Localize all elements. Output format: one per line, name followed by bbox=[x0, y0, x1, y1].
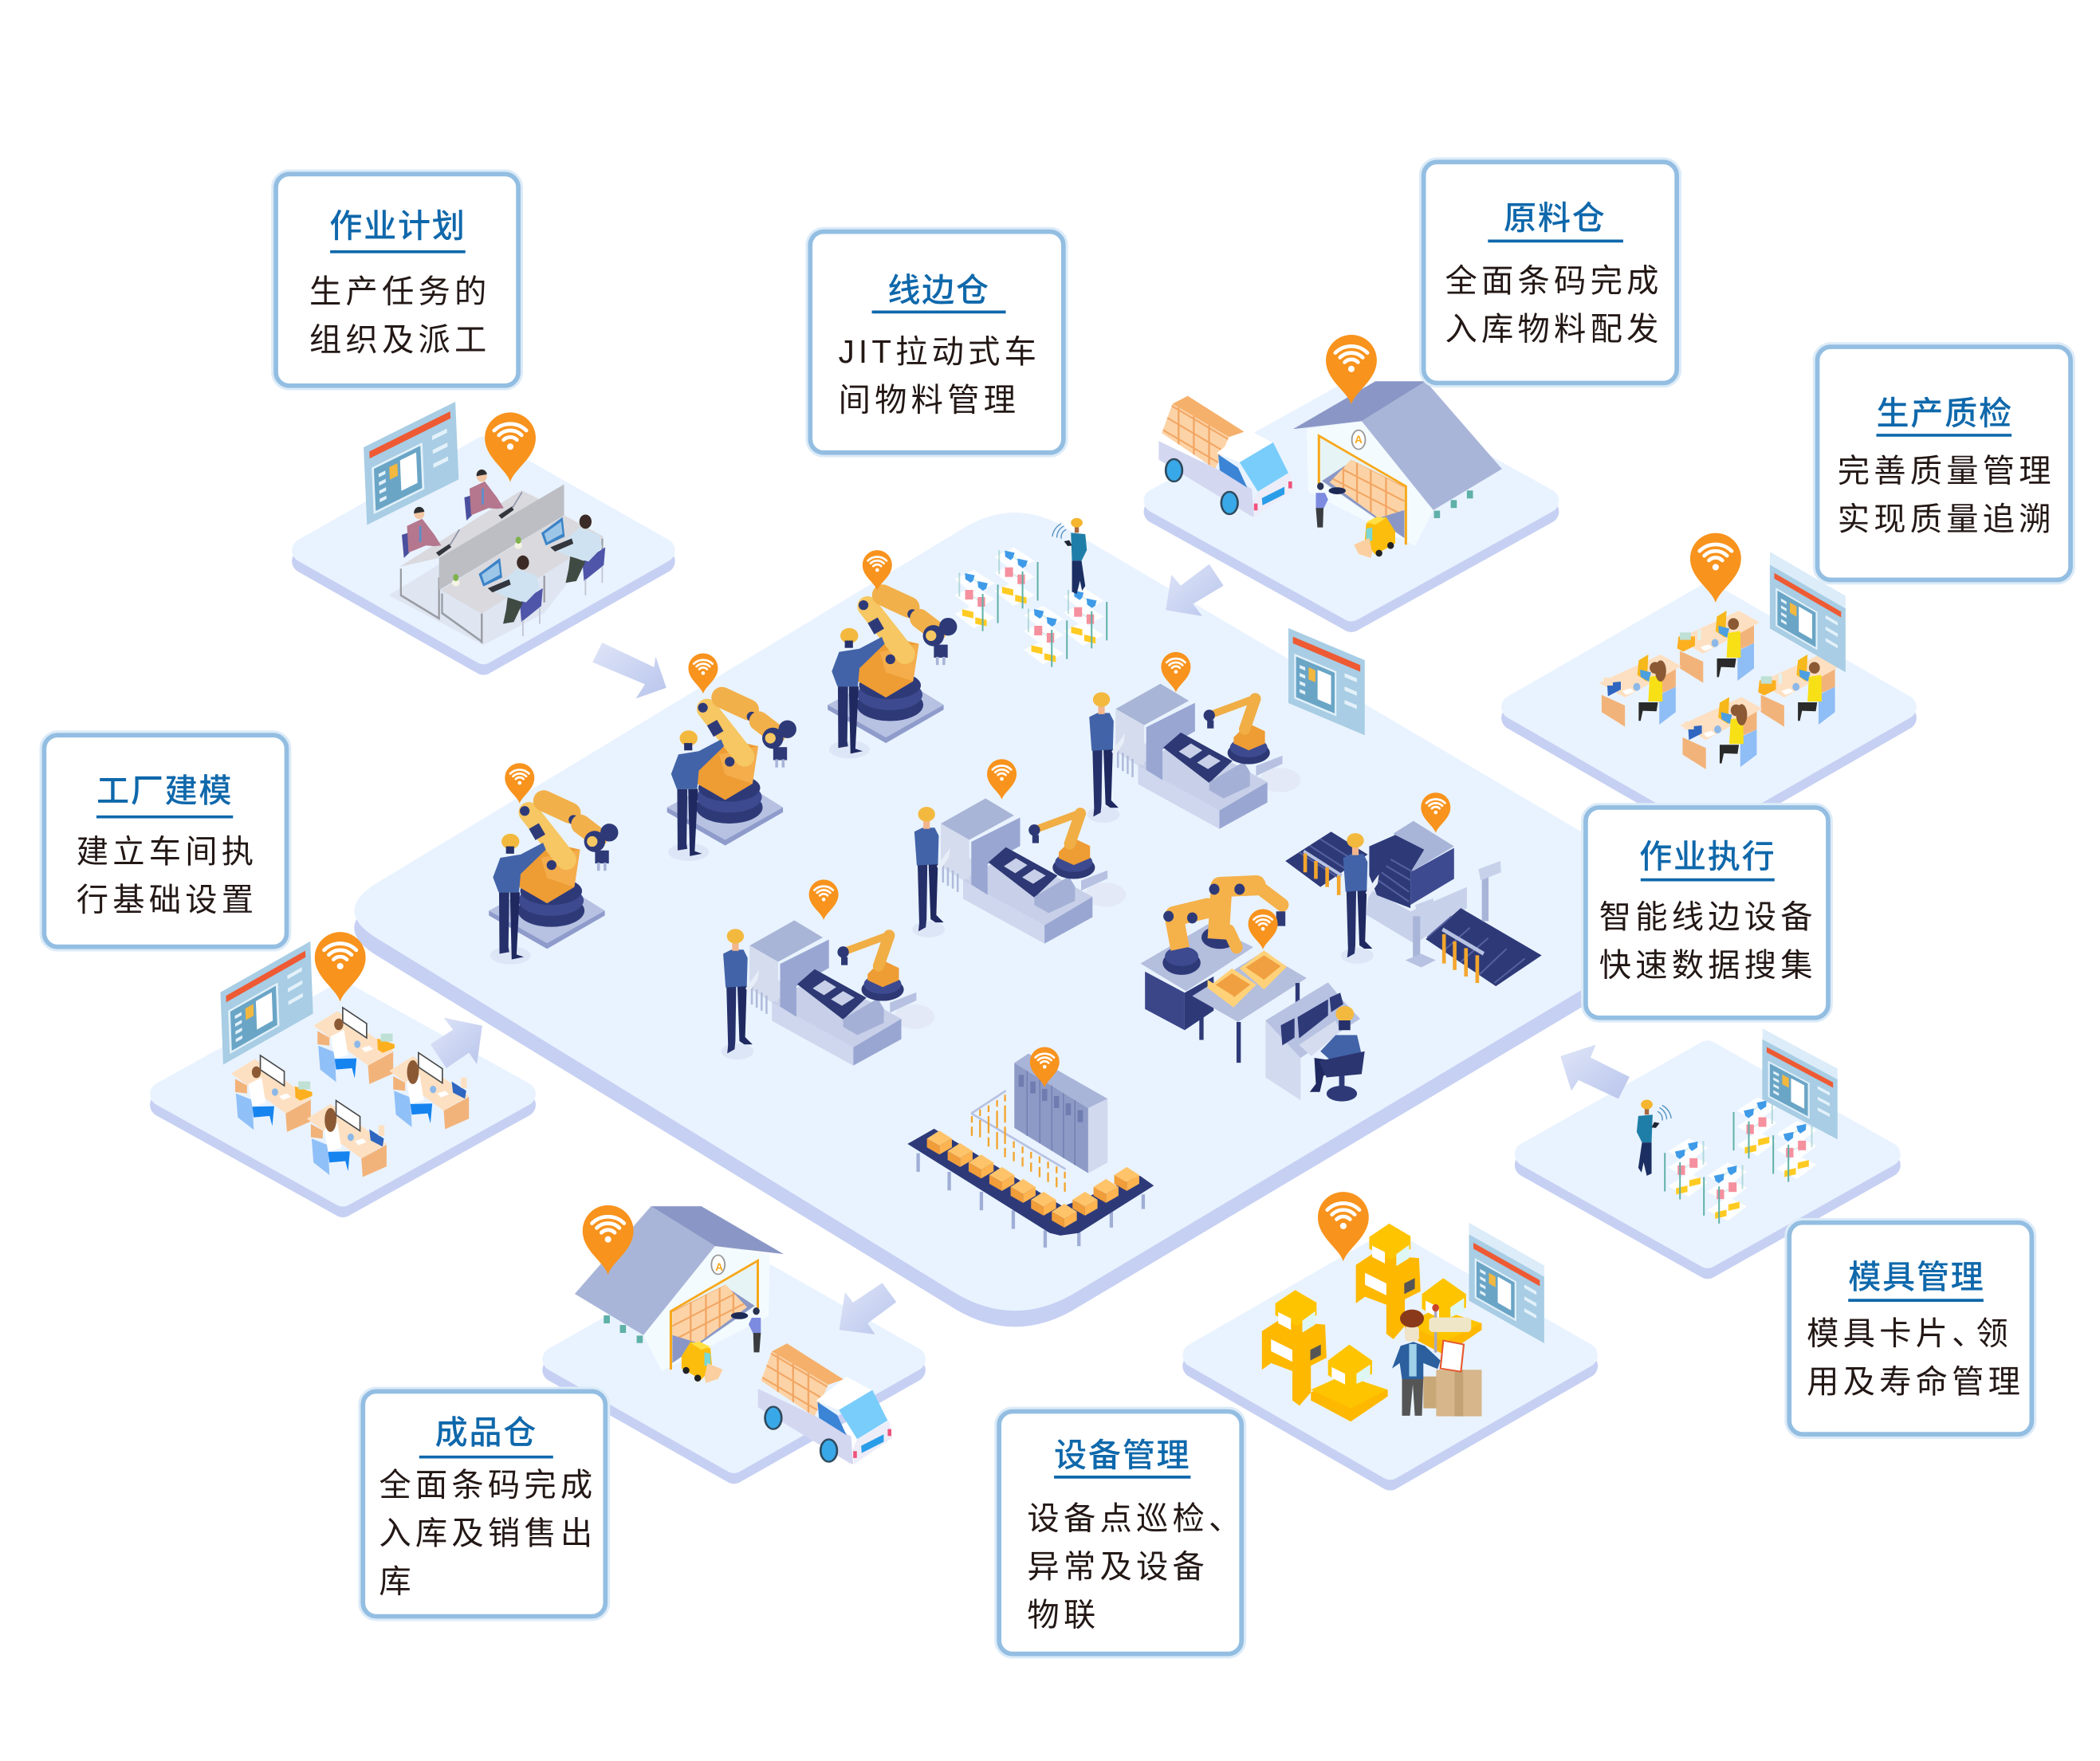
description: 异常及设备 bbox=[1027, 1549, 1209, 1585]
illustration: machining stations bbox=[722, 684, 1301, 1066]
platform: 设备管理 bbox=[1194, 1243, 1586, 1479]
illustration: 模具管理 racks and worker bbox=[1637, 1098, 1816, 1224]
panel: 生产质检 bbox=[1818, 347, 2071, 580]
description: JIT拉动式车 bbox=[839, 334, 1040, 370]
warehouse logo letter: A bbox=[1355, 434, 1363, 446]
illustration: conveyor line and X-ray station bbox=[1285, 821, 1542, 986]
panel: 模具管理 bbox=[1789, 1223, 2031, 1434]
screen panel: 工厂建模 bbox=[221, 941, 313, 1064]
heading: 作业执行 bbox=[1639, 839, 1776, 875]
platform: 原料仓 bbox=[1156, 392, 1547, 620]
description: 生产任务的 bbox=[309, 274, 491, 310]
description: 全面条码完成 bbox=[1445, 263, 1663, 299]
heading: 作业计划 bbox=[329, 207, 466, 244]
description: 库 bbox=[379, 1563, 415, 1599]
description: 建立车间执 bbox=[77, 834, 258, 870]
illustration: 成品仓 warehouse bbox=[575, 1206, 784, 1383]
panel: 设备管理 bbox=[999, 1412, 1245, 1654]
illustration: 成品仓 truck bbox=[752, 1341, 892, 1464]
platform: 作业计划 bbox=[304, 449, 663, 663]
panel: 线边仓 bbox=[810, 232, 1064, 453]
platform: 工厂建模 bbox=[162, 993, 524, 1205]
screen panel: 模具管理 bbox=[1762, 1028, 1838, 1139]
illustration: 原料仓 truck bbox=[1153, 393, 1293, 517]
panel: 成品仓 bbox=[363, 1391, 605, 1617]
screen panel: 生产质检 bbox=[1770, 552, 1846, 672]
illustration: 工厂建模 desks bbox=[231, 1008, 469, 1177]
description: 用及寿命管理 bbox=[1807, 1364, 2024, 1400]
platform: 模具管理 bbox=[1527, 1052, 1889, 1267]
screen panel: production line bbox=[1288, 628, 1365, 735]
illustration: control console and seated operator bbox=[1265, 982, 1365, 1102]
description: 入库物料配发 bbox=[1445, 312, 1663, 348]
platform: 成品仓 bbox=[554, 1257, 914, 1472]
illustration: lockers and sorting conveyor bbox=[907, 1054, 1154, 1248]
panel: 作业执行 bbox=[1586, 808, 1828, 1018]
description: 间物料管理 bbox=[839, 383, 1020, 419]
arrow: 原料仓 to factory bbox=[1166, 564, 1224, 616]
description: 模具卡片、领 bbox=[1807, 1316, 2012, 1352]
arrow: 作业计划 to factory bbox=[592, 643, 667, 698]
heading: 线边仓 bbox=[887, 272, 990, 309]
heading: 生产质检 bbox=[1876, 395, 2013, 432]
heading: 原料仓 bbox=[1504, 199, 1606, 236]
illustration: office planning desks bbox=[389, 470, 605, 645]
description: 组织及派工 bbox=[309, 322, 491, 358]
illustration: line-side racks and worker bbox=[955, 518, 1107, 667]
illustration: robot arms with operators bbox=[489, 595, 957, 965]
panel: 作业计划 bbox=[276, 174, 518, 386]
platform: 生产质检 bbox=[1513, 595, 1905, 831]
heading: 模具管理 bbox=[1848, 1259, 1985, 1295]
illustration: robot packing table bbox=[1140, 884, 1307, 1063]
main factory platform bbox=[354, 513, 1686, 1327]
description: 设备点巡检、 bbox=[1027, 1500, 1245, 1536]
panel: 工厂建模 bbox=[44, 735, 286, 947]
arrow: factory to 成品仓 bbox=[840, 1283, 896, 1335]
operator: conveyor line bbox=[1341, 833, 1379, 964]
description: 行基础设置 bbox=[77, 882, 258, 918]
heading: 工厂建模 bbox=[96, 772, 233, 809]
illustration: 生产质检 desks bbox=[1599, 611, 1840, 769]
heading: 成品仓 bbox=[435, 1414, 537, 1451]
illustration: 设备管理 AGVs and worker bbox=[1262, 1224, 1482, 1421]
arrow: 模具管理 to factory bbox=[1560, 1045, 1630, 1099]
description: 物联 bbox=[1027, 1597, 1099, 1633]
panel: 原料仓 bbox=[1424, 162, 1677, 383]
warehouse logo letter: A bbox=[715, 1261, 723, 1273]
screen panel: 设备管理 bbox=[1469, 1223, 1544, 1343]
description: 入库及销售出 bbox=[379, 1515, 596, 1551]
description: 全面条码完成 bbox=[379, 1467, 596, 1503]
description: 完善质量管理 bbox=[1838, 454, 2055, 489]
description: 实现质量追溯 bbox=[1838, 501, 2055, 537]
screen panel: 作业计划 bbox=[364, 402, 458, 525]
illustration: 原料仓 warehouse bbox=[1293, 381, 1502, 558]
heading: 设备管理 bbox=[1054, 1437, 1190, 1473]
description: 智能线边设备 bbox=[1599, 899, 1817, 935]
arrow: 工厂建模 to factory bbox=[431, 1018, 482, 1068]
wifi pins bbox=[315, 335, 1741, 1275]
description: 快速数据搜集 bbox=[1599, 948, 1817, 984]
